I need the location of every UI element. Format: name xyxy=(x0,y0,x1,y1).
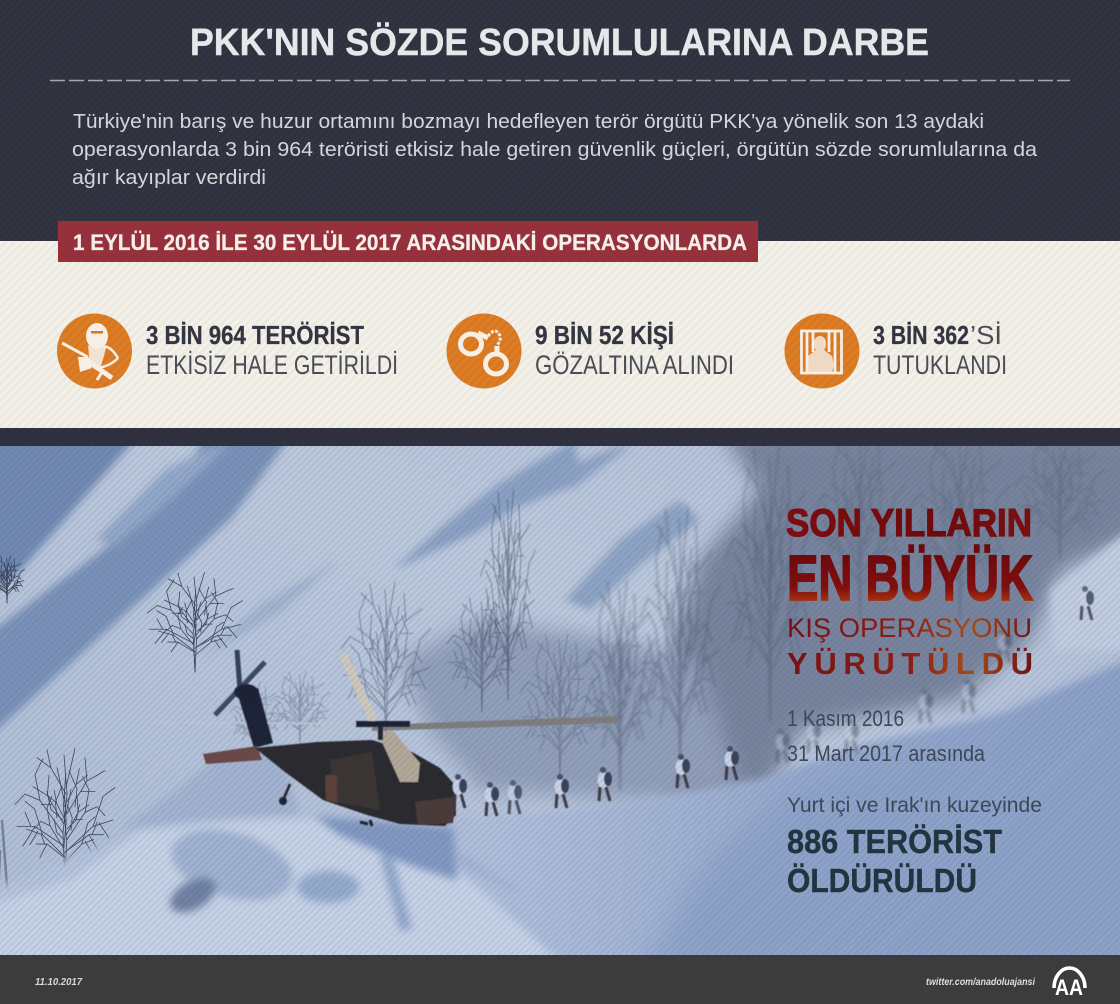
soldiers xyxy=(452,586,1094,816)
intro paragraph: ağır kayıplar verdirdi xyxy=(72,167,266,189)
intro paragraph: operasyonlarda 3 bin 964 teröristi etkisiz hale getiren güvenlik güçleri, örgütün sözde sorumlularına da xyxy=(72,139,1038,161)
casualty text xyxy=(787,794,1042,899)
casualty text: Yurt içi ve Irak'ın kuzeyinde xyxy=(787,794,1042,817)
stat: detained xyxy=(535,320,734,380)
icon: handcuffs xyxy=(446,314,522,388)
date banner: 1 EYLÜL 2016 İLE 30 EYLÜL 2017 ARASINDAKİ OPERASYONLARDA xyxy=(73,230,747,255)
red headline xyxy=(786,502,1033,681)
social handle: twitter.com/anadoluajansi xyxy=(926,976,1036,988)
icon: militant with weapon xyxy=(57,314,132,388)
stat: neutralized: ETKİSİZ HALE GETİRİLDİ xyxy=(146,349,398,380)
casualty text: ÖLDÜRÜLDÜ xyxy=(787,862,977,899)
logo: Anadolu Agency: AA xyxy=(1055,975,1083,1000)
footer xyxy=(0,955,1120,1004)
red headline: YÜRÜTÜLDÜ xyxy=(787,646,1033,681)
icon: prisoner behind bars xyxy=(784,314,860,388)
panel: dark header xyxy=(0,0,1120,241)
title: PKK'NIN SÖZDE SORUMLULARINA DARBE xyxy=(190,21,929,64)
date: 11.10.2017 xyxy=(35,977,82,988)
forest mass xyxy=(660,430,1120,790)
stat: arrested: ’Sİ xyxy=(970,320,1002,350)
photo: helicopter and soldiers on a snowy slope xyxy=(0,430,1120,980)
red headline: EN BÜYÜK xyxy=(787,542,1033,614)
date range text: 31 Mart 2017 arasında xyxy=(787,741,986,766)
intro paragraph xyxy=(72,111,1038,189)
casualty text: 886 TERÖRİST xyxy=(787,823,1002,860)
red headline: KIŞ OPERASYONU xyxy=(787,613,1032,643)
date range text: 1 Kasım 2016 xyxy=(787,706,904,731)
stat: arrested: 3 BİN 362 xyxy=(873,320,969,350)
stat: detained: 9 BİN 52 KİŞİ xyxy=(535,320,674,350)
date banner xyxy=(58,221,758,262)
stat: arrested xyxy=(873,320,1007,380)
snow ground xyxy=(0,660,1120,970)
snow mound shadows xyxy=(164,816,520,930)
helicopter xyxy=(150,650,618,826)
slope shadow bands xyxy=(0,430,700,830)
bare trees xyxy=(0,431,1105,953)
stat: detained: GÖZALTINA ALINDI xyxy=(535,350,734,380)
intro paragraph: Türkiye'nin barış ve huzur ortamını bozmayı hedefleyen terör örgütü PKK'ya yönelik son 13 aydaki xyxy=(73,111,984,133)
red headline: SON YILLARIN xyxy=(786,502,1032,545)
panel: statistics xyxy=(0,221,1120,428)
stat: neutralized: 3 BİN 964 TERÖRİST xyxy=(146,320,364,350)
stat: arrested: TUTUKLANDI xyxy=(873,350,1007,380)
date range text xyxy=(787,706,986,766)
stat: neutralized xyxy=(146,320,398,380)
